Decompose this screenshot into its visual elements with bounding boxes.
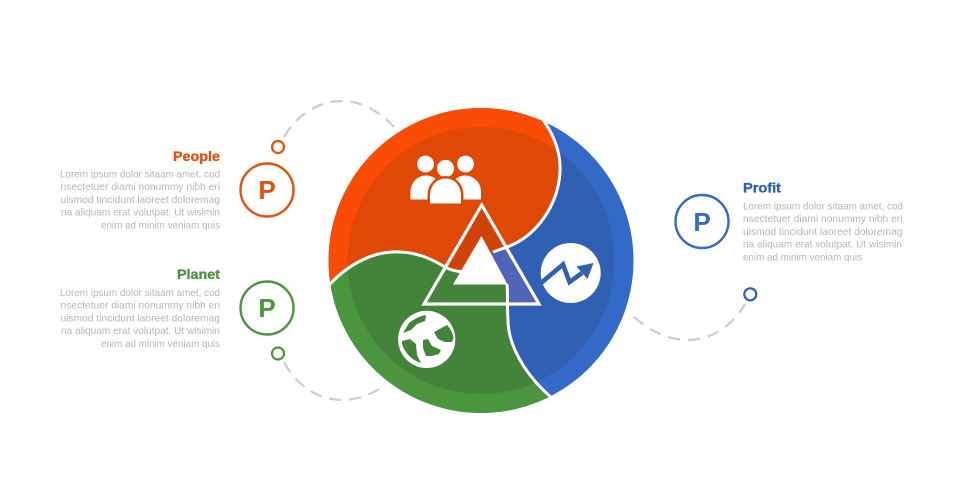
badge: planet: P: [258, 293, 276, 323]
text block: profit: na aliquam erat volutpat. Ut wisimin: [743, 239, 902, 251]
text block: planet: na aliquam erat volutpat. Ut wisimin: [61, 325, 220, 337]
text block: people: nsectetuer diami nonummy nibh eri: [60, 181, 220, 193]
badge: people: P: [258, 175, 276, 205]
triangle white centre: [453, 236, 508, 284]
badge: people: [240, 164, 294, 216]
segment: planet green: [330, 253, 550, 413]
node: profit: [744, 288, 756, 300]
connector: people dashed arc: [284, 101, 394, 137]
text block: profit: [743, 200, 903, 263]
central triangle fills: [448, 208, 536, 302]
text block: planet: uismod tincidunt laoreet doloremag: [60, 312, 220, 324]
main circle diagram: [328, 108, 634, 413]
connector: profit dashed arc: [634, 304, 745, 340]
segment: profit blue: [320, 100, 640, 420]
node: planet: [272, 348, 284, 360]
text block: profit: Lorem ipsum dolor sitaam amet, cod: [743, 200, 903, 212]
icon: globe: [398, 311, 455, 368]
text block: people: [60, 168, 220, 231]
text block: people: na aliquam erat volutpat. Ut wisimin: [61, 207, 220, 219]
badge: profit: [676, 195, 728, 248]
badge: profit: P: [693, 207, 711, 237]
node: people: [272, 141, 284, 153]
connector: planet dashed arc: [284, 362, 386, 400]
icon: growth chart: [541, 243, 601, 303]
segment: people orange: [328, 108, 559, 284]
text block: people: enim ad minim veniam quis: [101, 219, 220, 231]
text block: people: uismod tincidunt laoreet doloremag: [60, 194, 220, 206]
text block: people: Lorem ipsum dolor sitaam amet, cod: [60, 168, 220, 180]
text block: profit: enim ad minim veniam quis: [743, 251, 862, 263]
badge: planet: [240, 282, 294, 334]
triangle outline: [424, 205, 539, 304]
text block: planet: Lorem ipsum dolor sitaam amet, cod: [60, 287, 220, 299]
text block: planet: [60, 287, 220, 350]
heading: planet: Planet: [177, 267, 221, 282]
text block: profit: nsectetuer diami nonummy nibh eri: [743, 213, 902, 225]
heading: people: People: [173, 149, 221, 164]
heading: profit: Profit: [743, 180, 782, 196]
icon: people: [410, 156, 481, 204]
text block: planet: enim ad minim veniam quis: [101, 338, 220, 350]
text block: planet: nsectetuer diami nonummy nibh eri: [60, 300, 220, 312]
text block: profit: uismod tincidunt laoreet doloremag: [743, 226, 903, 238]
white dividers between segments: [320, 112, 562, 406]
